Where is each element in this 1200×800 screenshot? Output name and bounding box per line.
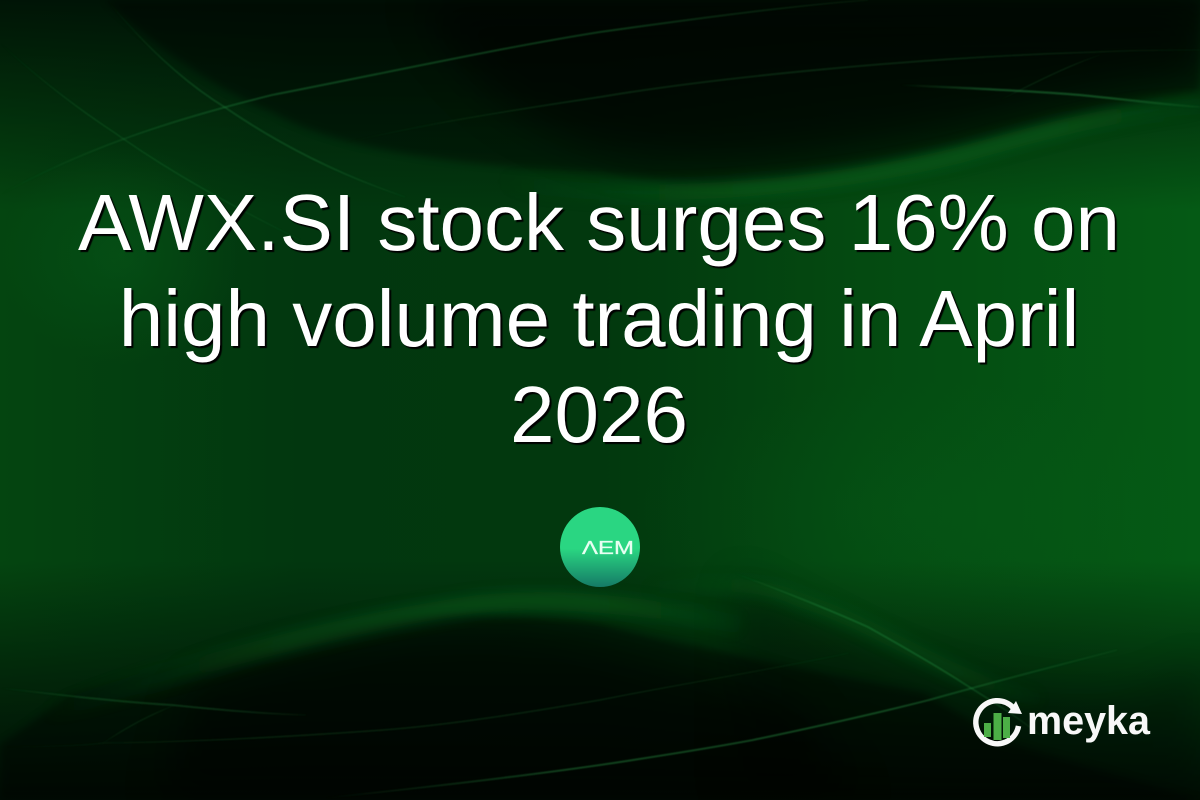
lower dark bump: soft body bbox=[0, 614, 1200, 800]
brand name: meyka bbox=[1027, 699, 1151, 743]
upper dark blob: soft left body bbox=[105, 0, 1200, 183]
glowing bands bbox=[500, 106, 1200, 192]
title: 2026 bbox=[510, 370, 688, 459]
icon: AEM company logo: ΛEM bbox=[582, 538, 634, 558]
brand logo: meyka bbox=[973, 698, 1151, 746]
icon: bar chart bbox=[984, 713, 1010, 740]
title: high volume trading in April bbox=[119, 274, 1079, 363]
lower dark bump: deep core bbox=[160, 630, 860, 800]
icon: circular arrow bbox=[976, 701, 1022, 744]
upper dark blob: deep core bbox=[420, 0, 1200, 164]
lower right fade into dark bbox=[734, 575, 1200, 800]
title bbox=[78, 178, 1120, 459]
title: AWX.SI stock surges 16% on bbox=[78, 178, 1120, 267]
icon: AEM company logo bbox=[560, 507, 640, 587]
